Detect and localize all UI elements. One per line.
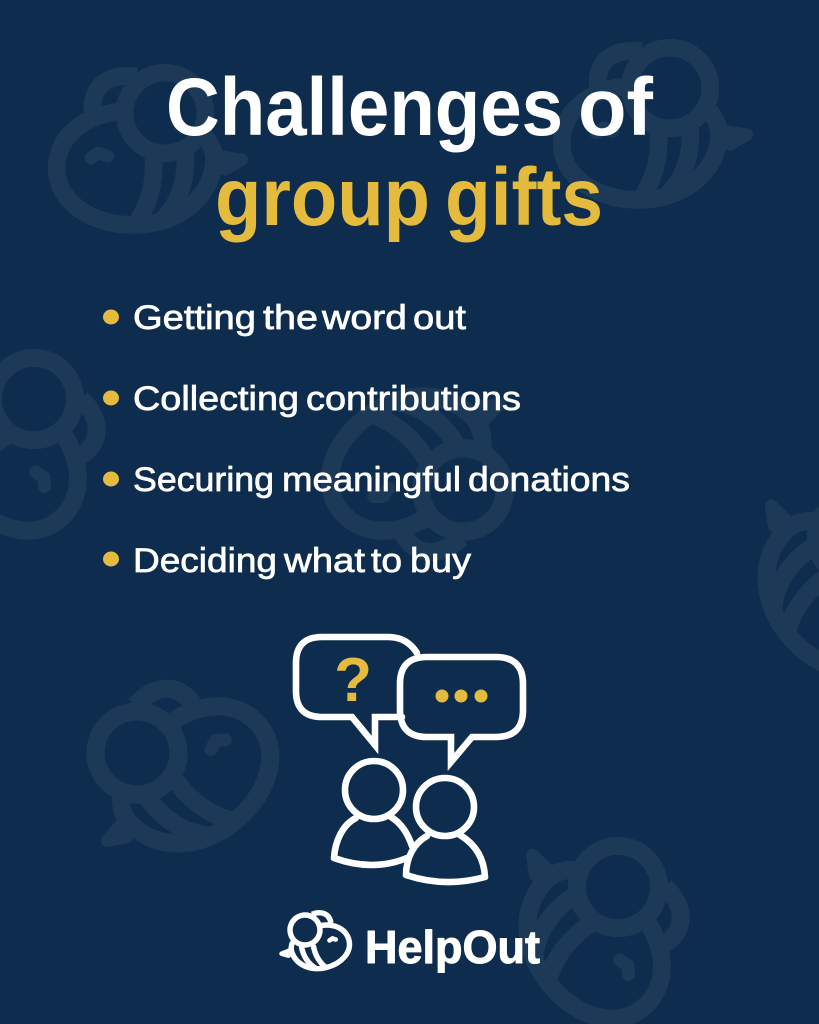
bullet 4 bbox=[103, 542, 471, 580]
bullet 3: Securing bbox=[133, 461, 274, 499]
bee watermark: left edge bbox=[0, 312, 135, 556]
title line 1: of bbox=[578, 62, 654, 153]
bullet 4: to bbox=[371, 542, 402, 580]
bee watermark: bottom right bbox=[480, 800, 719, 1024]
bullet 3 bbox=[103, 461, 630, 499]
bullet 1: the bbox=[263, 299, 318, 337]
bullet 1: out bbox=[413, 299, 467, 337]
bullet 3: donations bbox=[468, 461, 630, 499]
bullet 1: Getting bbox=[133, 299, 256, 337]
title line 2: gifts bbox=[445, 152, 603, 243]
logo bee mark bbox=[274, 906, 354, 977]
title line 1: Challenges bbox=[166, 62, 563, 153]
bullet 1: word bbox=[321, 299, 407, 337]
bullet 2: Collecting bbox=[133, 380, 299, 418]
title line 2: group bbox=[215, 152, 430, 243]
speech bubble: question: ? bbox=[334, 646, 372, 715]
bullet 4: buy bbox=[410, 542, 471, 580]
speech bubble: question bbox=[296, 637, 417, 745]
bullet 2: contributions bbox=[306, 380, 521, 418]
bee watermark: centre bbox=[305, 350, 552, 589]
bullet 1 bbox=[103, 299, 467, 337]
bee watermark: right edge bbox=[719, 451, 819, 695]
bee watermark: top right bbox=[562, 48, 747, 200]
bee watermark: top left bbox=[57, 73, 242, 225]
title line 2 bbox=[215, 152, 603, 243]
logo wordmark: HelpOut bbox=[365, 921, 540, 973]
bullet 2 bbox=[103, 380, 521, 418]
bee watermark: lower left bbox=[50, 650, 296, 892]
speech bubble: ellipsis bbox=[400, 657, 523, 762]
logo bbox=[274, 906, 540, 977]
bullet 4: what bbox=[283, 542, 366, 580]
bullet list bbox=[103, 299, 630, 580]
bullet 4: Deciding bbox=[133, 542, 277, 580]
bullet 3: meaningful bbox=[282, 461, 461, 499]
title bbox=[166, 62, 654, 243]
person 2 bbox=[406, 778, 485, 882]
person 1 bbox=[334, 761, 412, 865]
icon: two people talking bbox=[296, 637, 523, 882]
